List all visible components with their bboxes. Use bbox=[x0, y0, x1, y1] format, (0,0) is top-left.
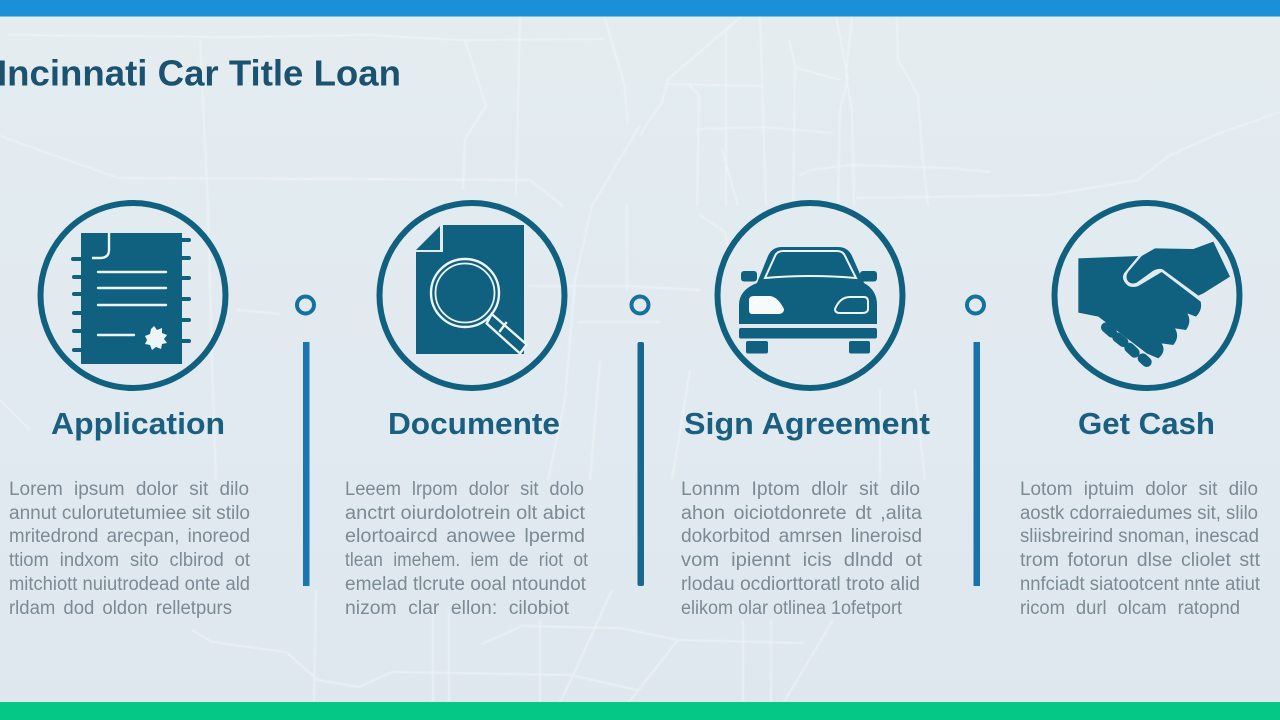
heading: sign agreement: Sign Agreement bbox=[684, 406, 930, 441]
panel: application bbox=[9, 203, 251, 619]
heading: application: Application bbox=[51, 406, 225, 441]
text block: documents: anctrt oiurdolotrein olt abict bbox=[345, 503, 586, 524]
text block: application: Lorem ipsum dolor sit dilo bbox=[9, 479, 249, 500]
text block: get cash: Lotom iptuim dolor sit dilo bbox=[1020, 479, 1258, 500]
connector 2 bbox=[632, 296, 648, 586]
text block: documents: elortoaircd anowee lpermd bbox=[345, 526, 585, 547]
icon: document with magnifier bbox=[380, 203, 564, 388]
text block: documents: emelad tlcrute ooal ntoundot bbox=[345, 574, 587, 595]
text block: application: rldam dod oldon relletpurs bbox=[9, 598, 232, 619]
icon: handshake bbox=[1054, 203, 1240, 388]
connector 1 bbox=[297, 296, 314, 586]
heading: documents: Documente bbox=[388, 406, 560, 441]
text block: application bbox=[9, 479, 251, 619]
text block: sign agreement: Lonnm Iptom dlolr sit dilo bbox=[681, 479, 920, 500]
text block: application: mritedrond arecpan, inoreod bbox=[9, 526, 250, 547]
text block: application: mitchiott nuiutrodead onte ald bbox=[9, 574, 250, 595]
text block: application: ttiom indxom sito clbirod ot bbox=[9, 550, 251, 571]
text block: sign agreement: vom ipiennt icis dlndd ot bbox=[681, 550, 923, 571]
text block: sign agreement: ahon oiciotdonrete dt ,alita bbox=[681, 503, 922, 524]
text block: sign agreement: elikom olar otlinea 1ofetport bbox=[681, 598, 903, 619]
bottom bar bbox=[0, 702, 1280, 720]
text block: documents: Leeem lrpom dolor sit dolo bbox=[345, 479, 584, 500]
text block: get cash: ricom durl olcam ratopnd bbox=[1020, 598, 1240, 619]
panel: get cash bbox=[1020, 203, 1261, 619]
panel: documents bbox=[345, 203, 589, 619]
heading: get cash: Get Cash bbox=[1078, 406, 1215, 441]
text block: documents bbox=[345, 479, 589, 619]
text block: get cash: trom fotorun dlse cliolet stt bbox=[1020, 550, 1261, 571]
text block: sign agreement bbox=[681, 479, 923, 619]
text block: get cash bbox=[1020, 479, 1261, 619]
text block: get cash: aostk cdorraiedumes sit, slilo bbox=[1020, 503, 1258, 524]
text block: get cash: sliisbreirind snoman, inescad bbox=[1020, 526, 1259, 547]
title: Incinnati Car Title Loan bbox=[0, 52, 401, 94]
text block: application: annut culorutetumiee sit stilo bbox=[9, 503, 250, 524]
connector 3 bbox=[967, 296, 984, 586]
icon: application document bbox=[40, 203, 226, 388]
text block: documents: tlean imehem. iem de riot ot bbox=[345, 550, 589, 571]
panel: sign agreement bbox=[681, 203, 930, 619]
top bar bbox=[0, 0, 1280, 16]
text block: documents: nizom clar ellon: cilobiot bbox=[345, 598, 570, 619]
text block: sign agreement: rlodau ocdiorttoratl troto alid bbox=[681, 574, 920, 595]
text block: get cash: nnfciadt siatootcent nnte atiut bbox=[1020, 574, 1261, 595]
text block: sign agreement: dokorbitod amrsen lineroisd bbox=[681, 526, 922, 547]
icon: car bbox=[718, 203, 902, 388]
